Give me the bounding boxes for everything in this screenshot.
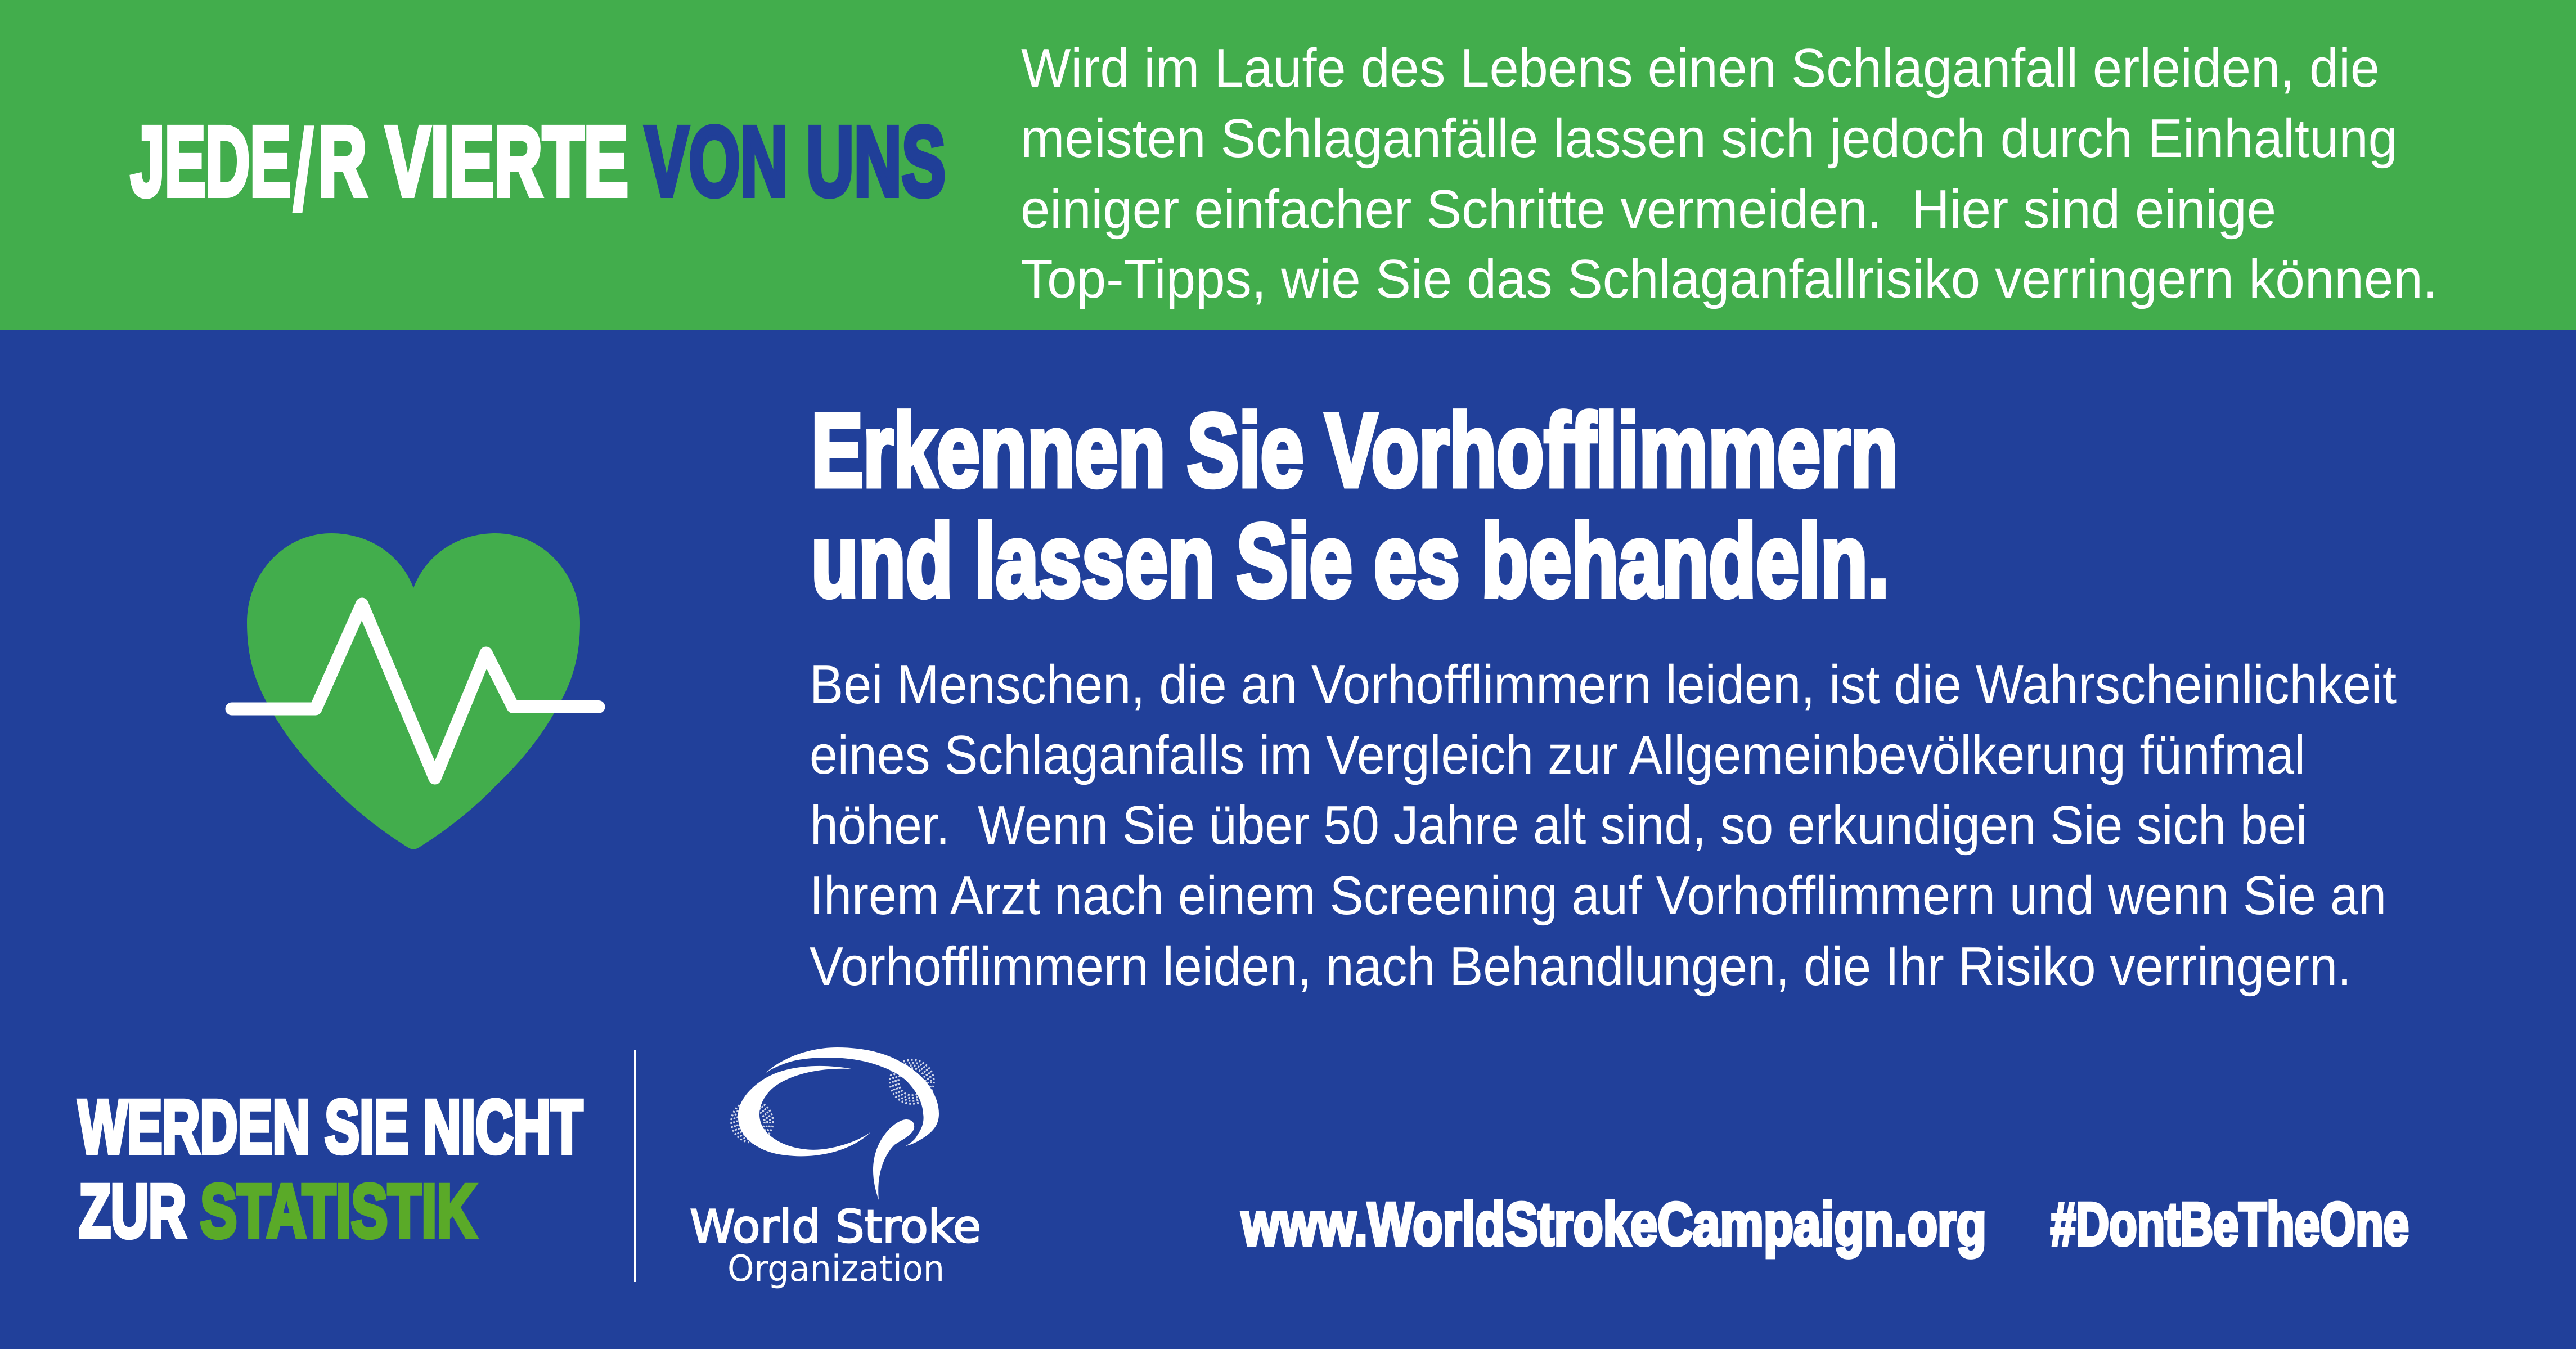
heading: Jede/r vierte von uns: VON UNS [645,107,946,217]
heading: Jede/r vierte von uns [131,105,946,236]
text block: body paragraph: Bei Menschen, die an Vorhofflimmern leiden, ist die Wahrscheinlichkeit [810,654,2397,715]
text block: body paragraph: eines Schlaganfalls im Vergleich zur Allgemeinbevölkerung fünfmal [810,724,2305,785]
text block: intro [1020,37,2438,309]
link: campaign website and hashtag: www.WorldStrokeCampaign.org [1241,1190,1986,1258]
slogan: Werden Sie nicht zur Statistik: STATISTIK [200,1170,476,1253]
text block: intro: einiger einfacher Schritte vermeiden. Hier sind einige [1020,178,2276,240]
heading: Erkennen Sie Vorhofflimmern: Erkennen Sie Vorhofflimmern [811,392,1898,508]
text block: intro: Wird im Laufe des Lebens einen Schlaganfall erleiden, die [1021,37,2380,98]
logo: World Stroke Organization: World Stroke [690,1200,981,1253]
text block: body paragraph: höher. Wenn Sie über 50 Jahre alt sind, so erkundigen Sie sich bei [810,794,2307,856]
link: campaign website and hashtag: #DontBeTheOne [2051,1190,2409,1258]
heading: Jede/r vierte von uns: JEDE [131,107,291,217]
slogan: Werden Sie nicht zur Statistik: ZUR [79,1170,186,1253]
heading: Erkennen Sie Vorhofflimmern: und lassen Sie es behandeln. [811,502,1889,618]
text block: body paragraph [810,654,2397,997]
text block: body paragraph: Vorhofflimmern leiden, nach Behandlungen, die Ihr Risiko verringern. [810,936,2352,997]
icon: green heart with heartbeat line [232,533,599,849]
heading: Jede/r vierte von uns: R VIERTE [318,107,628,217]
slogan: Werden Sie nicht zur Statistik: WERDEN SIE NICHT [78,1085,583,1169]
text block: intro: Top-Tipps, wie Sie das Schlaganfallrisiko verringern können. [1020,248,2438,309]
heading: Jede/r vierte von uns: / [291,105,315,236]
heading: Erkennen Sie Vorhofflimmern [811,392,1898,618]
text block: body paragraph: Ihrem Arzt nach einem Screening auf Vorhofflimmern und wenn Sie an [810,865,2386,926]
logo: World Stroke Organization [690,1047,981,1290]
logo: World Stroke Organization: Organization [727,1248,945,1290]
text block: intro: meisten Schlaganfälle lassen sich jedoch durch Einhaltung [1020,107,2398,169]
slogan: Werden Sie nicht zur Statistik [78,1085,583,1253]
panel: green top banner [0,0,2576,330]
